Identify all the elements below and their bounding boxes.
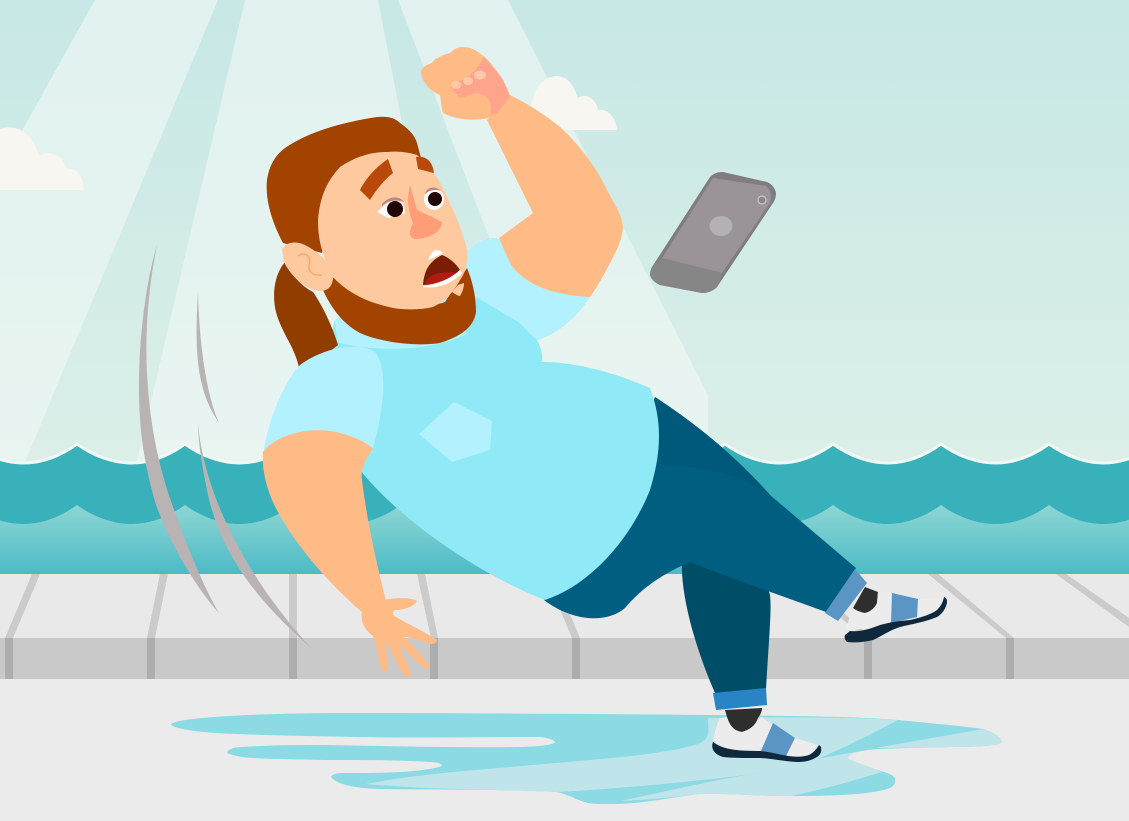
fist knuckles <box>451 70 486 89</box>
phone camera <box>758 196 766 204</box>
right eyebrow <box>416 157 434 173</box>
phone button <box>710 216 732 236</box>
head <box>267 117 476 344</box>
ear <box>282 243 333 291</box>
hip shade <box>655 397 772 497</box>
front leg <box>544 397 947 642</box>
front shoe sole <box>845 597 947 642</box>
ear detail <box>298 254 322 275</box>
sleeve <box>264 347 383 470</box>
pavement <box>0 574 1129 679</box>
motion line: inner <box>198 422 312 649</box>
puddle highlight: lower right <box>621 750 882 801</box>
beard <box>323 268 476 344</box>
teeth <box>428 250 443 260</box>
right cloud <box>530 76 617 130</box>
right arm <box>487 95 623 297</box>
front wave <box>0 505 1129 574</box>
falling phone <box>650 172 776 293</box>
ponytail <box>274 262 338 375</box>
left eyebrow <box>360 159 393 200</box>
hair <box>267 117 421 253</box>
hand <box>362 598 437 677</box>
light beams <box>0 0 708 470</box>
front leg cuff <box>825 569 867 621</box>
face <box>318 152 467 309</box>
nose <box>408 185 442 239</box>
front foot sock <box>853 587 878 613</box>
back shoe sole <box>712 742 821 762</box>
tongue <box>425 272 457 285</box>
back leg <box>682 560 821 762</box>
motion line: outer <box>139 245 219 613</box>
back shoe <box>713 717 818 757</box>
phone lower band <box>650 258 723 293</box>
motion line: short <box>197 292 219 423</box>
water puddle <box>171 713 1002 804</box>
ground <box>0 679 1129 821</box>
left eye <box>377 197 405 218</box>
front shoe <box>846 592 944 631</box>
puddle highlight: centre <box>366 717 898 792</box>
back leg cuff <box>713 688 767 710</box>
right eye <box>424 187 444 210</box>
fist palm shade <box>450 57 510 116</box>
back wave <box>0 444 1129 574</box>
left arm <box>263 347 437 677</box>
left cloud <box>0 127 84 190</box>
shirt pocket <box>419 402 492 462</box>
lower lip <box>423 270 462 287</box>
front shoe stripe <box>891 593 918 623</box>
shirt upper shoulder and collar highlight <box>335 238 590 349</box>
puddle highlight: right <box>875 729 1002 748</box>
back shoe stripe <box>761 723 795 756</box>
chin drool <box>452 283 464 296</box>
shirt torso <box>328 238 659 600</box>
back foot sock <box>725 708 762 732</box>
mouth <box>423 255 460 285</box>
sky background <box>0 0 1129 470</box>
raised fist <box>421 47 510 120</box>
arm <box>263 430 386 612</box>
phone screen <box>662 178 771 273</box>
